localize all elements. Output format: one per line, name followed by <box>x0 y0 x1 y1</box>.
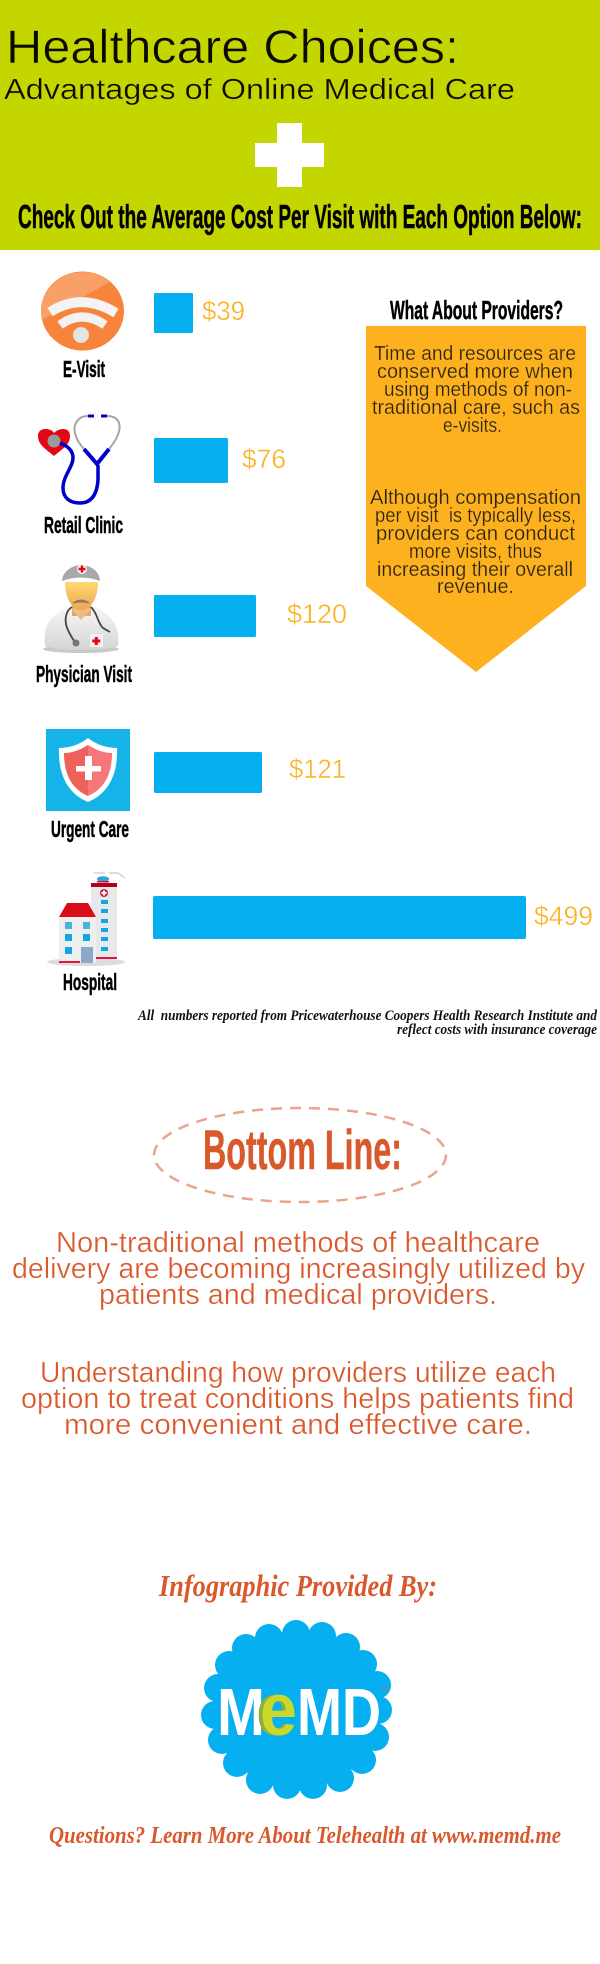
bar <box>153 896 526 939</box>
row: E-Visit <box>41 272 245 382</box>
title: Healthcare Choices: <box>6 20 459 73</box>
paragraph: compensation <box>370 487 581 598</box>
label: Retail Clinic <box>44 512 123 538</box>
heading text: Bottom Line: <box>203 1118 402 1181</box>
logo letters: TM <box>380 1688 389 1694</box>
paragraph two: option to treat conditions helps patients find <box>21 1383 574 1415</box>
value: $121 <box>289 754 346 784</box>
subtitle: Advantages of Online Medical Care <box>4 74 515 106</box>
icon: hospital building <box>47 873 125 966</box>
paragraph one: delivery are becoming increasingly utilized by <box>12 1253 585 1285</box>
logo letters <box>217 1668 389 1751</box>
paragraph: conserved resources: e-visits. <box>443 415 502 437</box>
paragraph: conserved resources: Time and resources are <box>374 343 576 365</box>
paragraph: conserved resources <box>372 343 580 437</box>
bottom line heading <box>154 1108 446 1202</box>
row: Retail Clinic <box>38 416 286 538</box>
value: $76 <box>242 444 286 474</box>
value: $120 <box>287 599 347 629</box>
label: Hospital <box>63 969 117 995</box>
label: E-Visit <box>63 356 105 382</box>
paragraph: compensation: increasing their overall <box>377 559 573 581</box>
paragraph one: Non-traditional methods of healthcare <box>56 1227 540 1259</box>
paragraph one <box>12 1227 585 1311</box>
bar <box>154 438 228 483</box>
paragraph: conserved resources: conserved more when <box>377 361 573 383</box>
bar <box>154 752 262 793</box>
provided-by heading: Infographic Provided By: <box>158 1568 437 1603</box>
paragraph two <box>21 1357 574 1441</box>
paragraph: compensation: revenue. <box>437 576 514 598</box>
paragraph: compensation: Although compensation <box>370 487 581 509</box>
panel: what about providers <box>366 295 586 672</box>
value: $499 <box>534 901 593 931</box>
row: Hospital <box>47 873 593 995</box>
paragraph: compensation: more visits, thus <box>409 541 542 563</box>
header banner <box>0 0 600 250</box>
icon: stethoscope and heart <box>38 416 120 503</box>
icon: white medical cross <box>255 123 324 187</box>
bar <box>154 293 193 333</box>
source note <box>137 1008 597 1038</box>
value: $39 <box>202 296 245 326</box>
paragraph two: Understanding how providers utilize each <box>40 1357 556 1389</box>
dashed ellipse <box>154 1108 446 1202</box>
paragraph: compensation: providers can conduct <box>376 523 575 545</box>
row: Physician Visit <box>36 564 347 687</box>
text block: bottom line paragraphs <box>12 1227 585 1441</box>
logo letters: MD <box>297 1675 381 1750</box>
logo letters: e <box>256 1668 294 1751</box>
logo: MeMD badge <box>201 1620 392 1799</box>
logo letters: e <box>260 1668 297 1751</box>
arrow-shaped panel background <box>366 326 586 672</box>
paragraph: conserved resources: traditional care, such as <box>372 397 580 419</box>
logo letters: M <box>217 1675 265 1750</box>
paragraph two: more convenient and effective care. <box>64 1409 532 1441</box>
icon: shield <box>46 729 130 811</box>
label: Urgent Care <box>51 816 129 842</box>
bar <box>154 595 256 637</box>
scalloped badge <box>201 1620 392 1799</box>
paragraph one: patients and medical providers. <box>99 1279 497 1311</box>
paragraph: compensation: per visit is typically less, <box>375 505 576 527</box>
icon: wifi signal badge <box>41 272 124 350</box>
icon: doctor <box>43 564 119 653</box>
label: Physician Visit <box>36 661 132 687</box>
row: Urgent Care <box>46 729 346 842</box>
paragraph: conserved resources: using methods of non- <box>384 379 572 401</box>
